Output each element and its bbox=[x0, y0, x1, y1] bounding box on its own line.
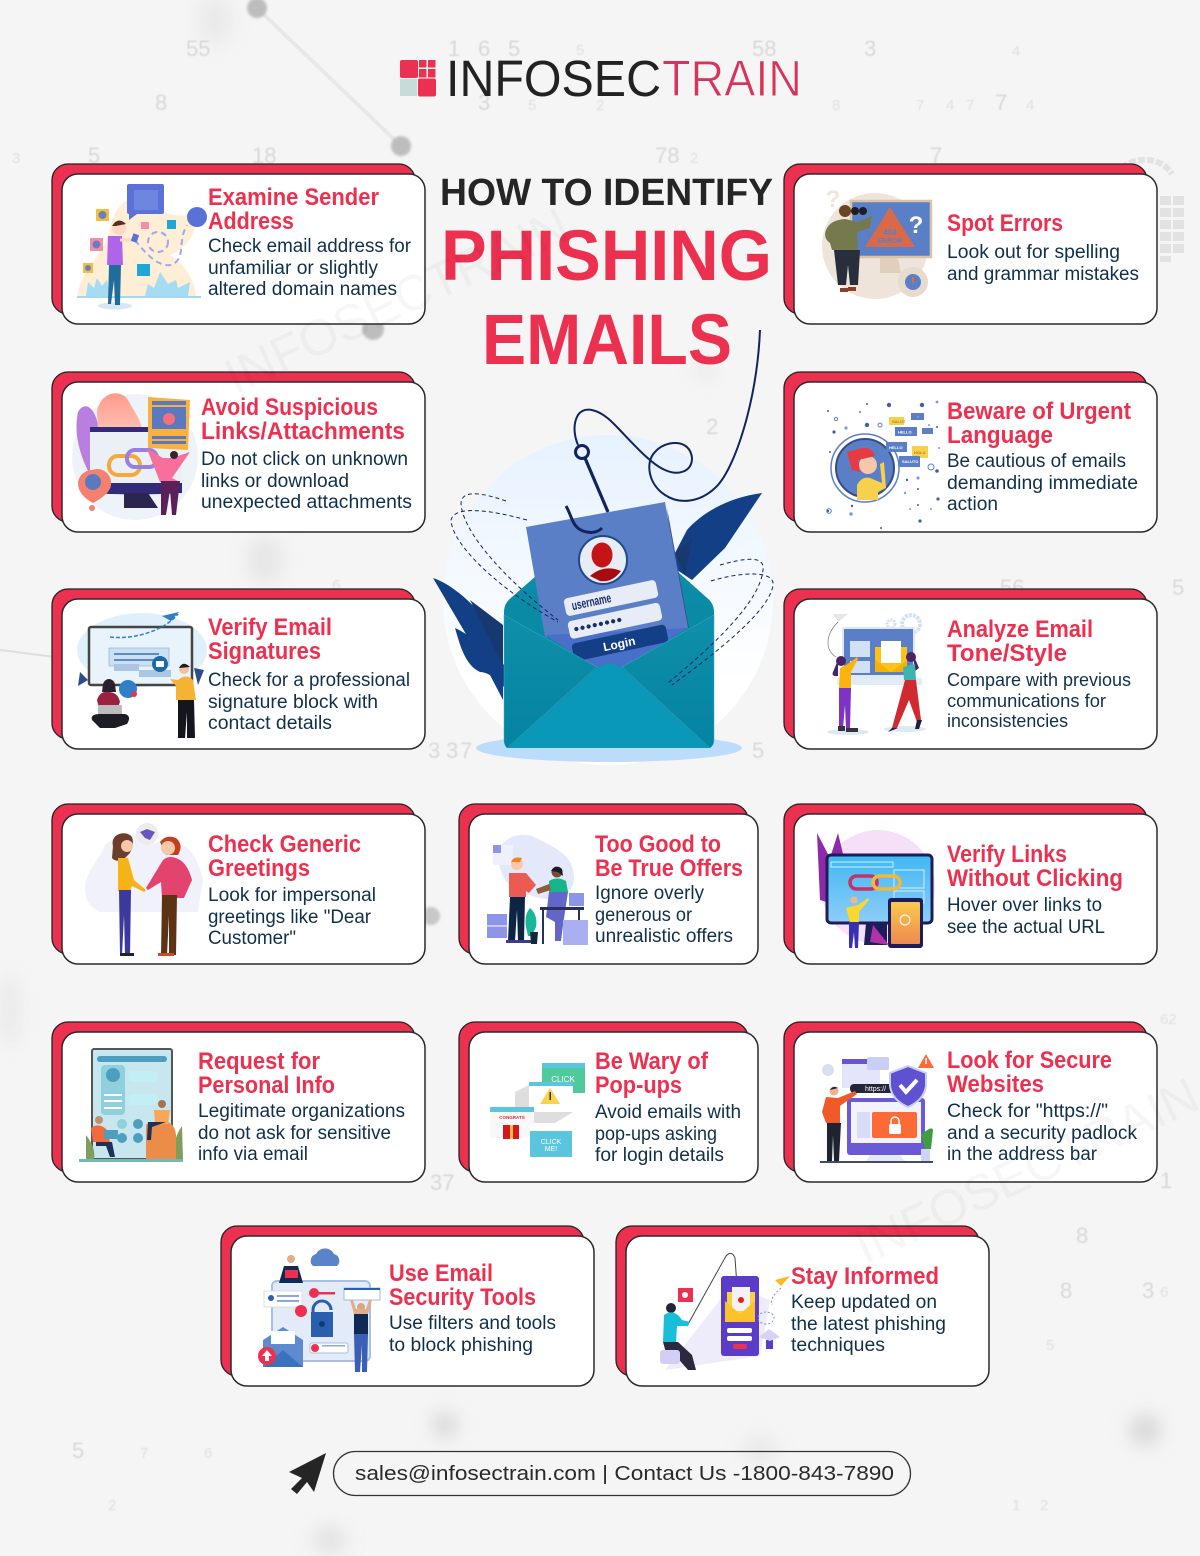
card: Beware of Urgent Language bbox=[784, 372, 1157, 532]
leaves bbox=[433, 493, 762, 700]
background: 7 bbox=[995, 90, 1007, 115]
background: 3 bbox=[864, 36, 876, 61]
background: 8 bbox=[155, 90, 167, 115]
background: 3 bbox=[1142, 1278, 1154, 1303]
heading: Greetings bbox=[208, 855, 310, 882]
heading: Verify Links bbox=[947, 841, 1067, 868]
background: 8 bbox=[1076, 1223, 1088, 1248]
heading: Tone/Style bbox=[947, 640, 1067, 667]
card: Verify Links Without Clicking bbox=[784, 804, 1157, 964]
body text: Compare with previous bbox=[947, 670, 1131, 690]
body text: in the address bar bbox=[947, 1144, 1098, 1165]
background: 2 bbox=[690, 150, 698, 167]
heading: Links/Attachments bbox=[201, 418, 405, 445]
icon: handshake bbox=[85, 823, 203, 956]
heading bbox=[947, 1047, 1112, 1098]
icon: two women with laptop email bbox=[827, 614, 926, 735]
icon: screen and two people bbox=[77, 612, 207, 738]
heading: Pop-ups bbox=[595, 1072, 682, 1099]
body text: signature block with bbox=[208, 692, 378, 713]
icon: stacked pop-up windows: CLICK bbox=[541, 1139, 562, 1146]
card: Be Wary of Pop-ups bbox=[459, 1022, 758, 1182]
hero illustration: phishing hook and envelope bbox=[433, 330, 773, 765]
card: Analyze Email Tone/Style bbox=[784, 589, 1157, 749]
background: 5 bbox=[72, 1438, 84, 1463]
body text: Check email address for bbox=[208, 236, 412, 257]
body text: Be cautious of emails bbox=[947, 451, 1126, 472]
heading bbox=[208, 184, 379, 235]
body text: Use filters and tools bbox=[389, 1313, 556, 1334]
logo bbox=[400, 50, 802, 107]
background: 2 bbox=[596, 97, 604, 114]
background: 7 bbox=[140, 1445, 148, 1462]
heading: Avoid Suspicious bbox=[201, 394, 378, 421]
icon: person with binoculars and 404 screen: ERROR bbox=[877, 238, 903, 245]
background: 2 bbox=[706, 414, 718, 439]
background: 18 bbox=[252, 143, 276, 168]
icon: shouting woman with speech tags: SALUTO bbox=[902, 459, 918, 464]
body text: techniques bbox=[791, 1335, 885, 1356]
body text: links or download bbox=[201, 471, 349, 492]
icon: shouting woman with speech tags: HELLO bbox=[898, 430, 912, 434]
heading bbox=[208, 614, 332, 665]
body text: unfamiliar or slightly bbox=[208, 258, 378, 279]
heading: Signatures bbox=[208, 638, 321, 665]
logo wordmark: INFOSEC bbox=[446, 50, 661, 107]
body text: inconsistencies bbox=[947, 711, 1068, 731]
background: 5 bbox=[528, 97, 536, 114]
body text bbox=[208, 236, 412, 300]
body text: Avoid emails with bbox=[595, 1102, 741, 1123]
body text: action bbox=[947, 494, 998, 515]
background: 2 bbox=[1040, 1497, 1048, 1514]
body text: demanding immediate bbox=[947, 473, 1138, 494]
body text bbox=[947, 242, 1139, 285]
background: 6 bbox=[332, 577, 340, 594]
icon: shouting woman with speech tags: HOLA bbox=[914, 450, 925, 455]
envelope flaps bbox=[504, 615, 597, 748]
heading: Analyze Email bbox=[947, 616, 1093, 643]
heading: Examine Sender bbox=[208, 184, 379, 211]
contact bar: sales@infosectrain.com | Contact Us -1800-843-7890 bbox=[355, 1463, 894, 1485]
body text: to block phishing bbox=[389, 1335, 533, 1356]
body text: and a security padlock bbox=[947, 1123, 1137, 1144]
background: 4 bbox=[946, 97, 954, 114]
contact bar bbox=[334, 1452, 910, 1496]
heading: Check Generic bbox=[208, 831, 361, 858]
body text: do not ask for sensitive bbox=[198, 1123, 391, 1144]
icon: two people shaking hands bbox=[487, 835, 588, 945]
background: 8 bbox=[1060, 1278, 1072, 1303]
background: 5 bbox=[508, 36, 520, 61]
icon: person with binoculars and 404 screen: ? bbox=[826, 186, 840, 213]
icon: person with binoculars and 404 screen: ? bbox=[909, 212, 923, 239]
background: 5 bbox=[752, 738, 764, 763]
body text: pop-ups asking bbox=[595, 1124, 717, 1145]
heading bbox=[595, 831, 743, 882]
background: 6 bbox=[204, 1445, 212, 1462]
background: 62 bbox=[1160, 1011, 1177, 1028]
body text: greetings like "Dear bbox=[208, 907, 372, 928]
background: 5 bbox=[576, 42, 584, 59]
body text bbox=[595, 1102, 741, 1166]
heading: Request for bbox=[198, 1048, 320, 1075]
card: Request for Personal Info bbox=[52, 1022, 425, 1182]
background: 5 bbox=[1172, 575, 1184, 600]
icon: secure monitor with shield: https:// bbox=[865, 1086, 886, 1093]
body text: Hover over links to bbox=[947, 895, 1102, 916]
card: Avoid Suspicious Links/Attachments bbox=[52, 372, 425, 532]
background: 7 bbox=[930, 143, 942, 168]
heading bbox=[389, 1260, 536, 1311]
card: Look for Secure Websites bbox=[784, 1022, 1157, 1182]
icon: hacker phishing a phone bbox=[660, 1253, 790, 1370]
icon: stacked pop-up windows bbox=[490, 1063, 585, 1157]
icon: monitor with links bbox=[72, 393, 198, 520]
fishing hook and line bbox=[451, 330, 773, 685]
background: 1 bbox=[448, 36, 460, 61]
heading: Address bbox=[208, 208, 294, 235]
heading bbox=[198, 1048, 335, 1099]
body text: Ignore overly bbox=[595, 883, 704, 904]
background: 55 bbox=[186, 36, 210, 61]
heading: Stay Informed bbox=[791, 1263, 939, 1290]
background: 4 bbox=[1026, 97, 1034, 114]
title: EMAILS bbox=[482, 301, 732, 380]
envelope back bbox=[504, 520, 714, 748]
body text: unexpected attachments bbox=[201, 492, 412, 513]
background: 2 bbox=[108, 1497, 116, 1514]
heading: Without Clicking bbox=[947, 865, 1123, 892]
heading: Look for Secure bbox=[947, 1047, 1112, 1074]
body text: generous or bbox=[595, 905, 693, 926]
heading bbox=[208, 831, 361, 882]
body text bbox=[947, 895, 1105, 938]
background: 5 bbox=[88, 143, 100, 168]
heading bbox=[201, 394, 405, 445]
background: 8 bbox=[832, 97, 840, 114]
body text: and grammar mistakes bbox=[947, 264, 1139, 285]
icon: tablet profile and people bbox=[79, 1049, 183, 1162]
heading: Personal Info bbox=[198, 1072, 335, 1099]
text: INFOSECTRAIN bbox=[846, 1067, 1200, 1275]
icon: secure monitor with shield bbox=[820, 1054, 934, 1163]
icon: person with phone bbox=[77, 184, 207, 310]
background: 78 bbox=[655, 143, 679, 168]
body text: info via email bbox=[198, 1144, 308, 1165]
body text bbox=[947, 451, 1138, 515]
body text: unrealistic offers bbox=[595, 926, 733, 947]
body text bbox=[791, 1292, 946, 1356]
background: 6 bbox=[1160, 1284, 1168, 1301]
phishing form: username bbox=[570, 590, 612, 613]
body text: Check for "https://" bbox=[947, 1101, 1108, 1122]
heading: Security Tools bbox=[389, 1284, 536, 1311]
phishing form: Login bbox=[602, 634, 637, 654]
background: 1 bbox=[1160, 1168, 1172, 1193]
background: 37 bbox=[430, 1170, 454, 1195]
background: 56 bbox=[1000, 575, 1024, 600]
background: 3 bbox=[428, 738, 440, 763]
background: 3 bbox=[478, 90, 490, 115]
background: 3 bbox=[12, 150, 20, 167]
body text: communications for bbox=[947, 691, 1106, 711]
body text bbox=[947, 670, 1131, 731]
body text: contact details bbox=[208, 713, 332, 734]
body text bbox=[208, 885, 376, 949]
background: 3 bbox=[446, 738, 458, 763]
title: PHISHING bbox=[441, 217, 772, 296]
background: 6 bbox=[478, 36, 490, 61]
icon: monitor with chain link bbox=[817, 830, 935, 948]
heading bbox=[947, 841, 1123, 892]
body text: Legitimate organizations bbox=[198, 1101, 405, 1122]
icon: stacked pop-up windows: CLICK bbox=[551, 1075, 575, 1084]
icon: security tools bbox=[258, 1248, 380, 1372]
logo mark bbox=[400, 60, 436, 96]
dashed swirls bbox=[451, 494, 773, 685]
logo: TRAIN bbox=[662, 50, 802, 107]
heading: Beware of Urgent bbox=[947, 398, 1131, 425]
icon: person with binoculars and 404 screen bbox=[822, 186, 931, 299]
heading: Websites bbox=[947, 1071, 1044, 1098]
background: 5 bbox=[1046, 1337, 1054, 1354]
background: 58 bbox=[752, 36, 776, 61]
body text: Customer" bbox=[208, 928, 296, 949]
body text: Check for a professional bbox=[208, 670, 410, 691]
body text: see the actual URL bbox=[947, 917, 1105, 938]
icon: shouting woman with speech tags bbox=[827, 401, 940, 529]
icon: shouting woman with speech tags: HELLO bbox=[889, 445, 903, 450]
icon: person with binoculars and 404 screen: ? bbox=[863, 267, 877, 294]
title bbox=[440, 172, 773, 380]
body text: Look for impersonal bbox=[208, 885, 376, 906]
body text bbox=[595, 883, 733, 947]
icon: cursor arrow bbox=[289, 1453, 326, 1494]
heading: Be True Offers bbox=[595, 855, 743, 882]
background: 4 bbox=[1012, 43, 1020, 60]
card: Stay Informed bbox=[616, 1226, 989, 1386]
card: Too Good to Be True Offers bbox=[459, 804, 758, 964]
icon: stacked pop-up windows: ME! bbox=[545, 1146, 557, 1153]
body text bbox=[389, 1313, 556, 1356]
background: 7 bbox=[966, 97, 974, 114]
body text: the latest phishing bbox=[791, 1314, 946, 1335]
body text bbox=[208, 670, 410, 734]
body text: Look out for spelling bbox=[947, 242, 1120, 263]
heading: Too Good to bbox=[595, 831, 721, 858]
body text bbox=[201, 449, 412, 513]
text: INFOSECTRAIN bbox=[216, 197, 577, 405]
phishing form bbox=[526, 502, 689, 668]
heading: Use Email bbox=[389, 1260, 493, 1287]
icon: person with binoculars and 404 screen: 404 bbox=[883, 228, 897, 237]
phishing form: •••••••• bbox=[572, 611, 625, 638]
heading bbox=[947, 616, 1093, 667]
icon: shouting woman with speech tags: SALUT bbox=[892, 419, 906, 424]
heading bbox=[595, 1048, 709, 1099]
background: 7 bbox=[916, 97, 924, 114]
body text: for login details bbox=[595, 1145, 724, 1166]
icon: stacked pop-up windows: CONGRATS bbox=[499, 1115, 525, 1120]
heading: Spot Errors bbox=[947, 210, 1063, 237]
heading: Language bbox=[947, 422, 1053, 449]
heading bbox=[947, 398, 1131, 449]
body text: Keep updated on bbox=[791, 1292, 937, 1313]
background: 7 bbox=[460, 738, 472, 763]
body text: Do not click on unknown bbox=[201, 449, 408, 470]
card: Use Email Security Tools bbox=[221, 1226, 594, 1386]
card: Examine Sender Address bbox=[52, 164, 425, 324]
body text bbox=[198, 1101, 405, 1165]
heading: Verify Email bbox=[208, 614, 332, 641]
card: Check Generic Greetings bbox=[52, 804, 425, 964]
heading: Be Wary of bbox=[595, 1048, 709, 1075]
card: Verify Email Signatures bbox=[52, 589, 425, 749]
body text bbox=[947, 1101, 1137, 1165]
title: HOW TO IDENTIFY bbox=[440, 172, 773, 214]
card: Spot Errors bbox=[784, 164, 1157, 324]
background: 1 bbox=[1012, 1497, 1020, 1514]
body text: altered domain names bbox=[208, 279, 397, 300]
